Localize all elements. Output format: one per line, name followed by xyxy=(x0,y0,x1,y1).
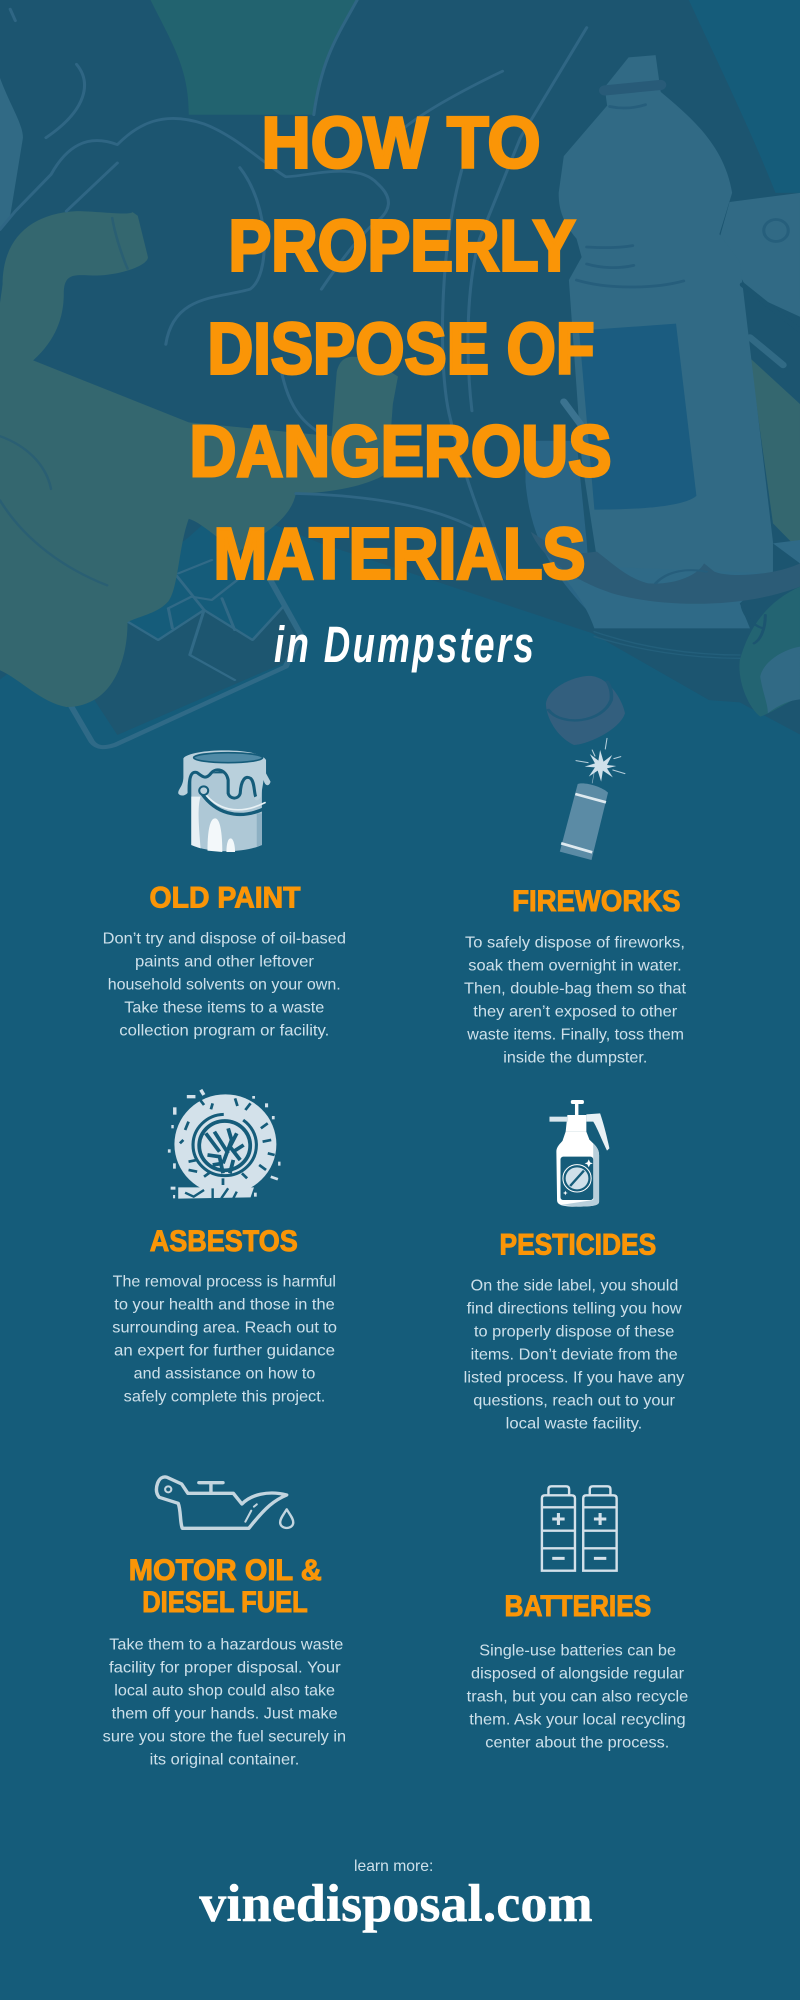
text: old paint: Don’t try and dispose of oil-based xyxy=(103,930,346,947)
website address: vinedisposal.com xyxy=(199,1875,593,1933)
text: pesticides: questions, reach out to your xyxy=(473,1392,676,1409)
text: pesticides: listed process. If you have any xyxy=(464,1369,684,1386)
text: fireworks: waste items. Finally, toss them xyxy=(466,1026,684,1043)
text: asbestos: to your health and those in the xyxy=(114,1296,335,1313)
panel: motor oil and diesel fuel xyxy=(103,1477,346,1768)
heading: old paint: OLD PAINT xyxy=(150,882,300,914)
title xyxy=(190,102,612,594)
heading: fireworks: FIREWORKS xyxy=(512,885,680,918)
title: DISPOSE OF xyxy=(208,308,594,390)
icon: two batteries xyxy=(542,1486,617,1571)
text: batteries: Single-use batteries can be xyxy=(479,1642,676,1659)
text: asbestos: and assistance on how to xyxy=(134,1365,315,1382)
heading: asbestos: ASBESTOS xyxy=(150,1225,298,1258)
text: pesticides: items. Don’t deviate from the xyxy=(471,1346,678,1363)
icon: paint can xyxy=(178,750,271,852)
text: fireworks xyxy=(464,934,687,1066)
text: old paint: household solvents on your own. xyxy=(108,976,341,993)
icon: oil can xyxy=(156,1477,293,1528)
text: motor oil and diesel fuel: local auto shop could also take xyxy=(114,1682,335,1699)
text: batteries: trash, but you can also recycle xyxy=(467,1688,688,1705)
title: HOW TO xyxy=(262,102,540,184)
text: fireworks: Then, double-bag them so that xyxy=(464,980,687,997)
footer xyxy=(199,1858,593,1933)
text: pesticides: find directions telling you how xyxy=(467,1300,682,1317)
learn more label: learn more: xyxy=(354,1858,433,1875)
heading: motor oil and diesel fuel: DIESEL FUEL xyxy=(142,1586,308,1619)
panel: asbestos xyxy=(112,1089,337,1405)
text: old paint: Take these items to a waste xyxy=(124,999,324,1016)
text: batteries xyxy=(467,1642,688,1751)
heading: batteries: BATTERIES xyxy=(504,1590,651,1623)
text: pesticides: On the side label, you should xyxy=(471,1277,678,1294)
text: pesticides xyxy=(464,1277,684,1432)
text: motor oil and diesel fuel: its original container. xyxy=(150,1751,299,1768)
title: DANGEROUS xyxy=(190,411,612,492)
text: pesticides: local waste facility. xyxy=(506,1415,642,1432)
icon: firecracker xyxy=(560,738,625,860)
text: batteries: them. Ask your local recycling xyxy=(469,1711,686,1728)
text: fireworks: soak them overnight in water. xyxy=(468,957,682,974)
panel: old paint xyxy=(103,750,346,1039)
heading: pesticides: PESTICIDES xyxy=(500,1228,656,1262)
text: fireworks: they aren’t exposed to other xyxy=(473,1003,678,1020)
panel: batteries xyxy=(467,1486,688,1751)
title: MATERIALS xyxy=(214,514,586,594)
text: motor oil and diesel fuel: them off your hands. Just make xyxy=(112,1705,338,1722)
text: pesticides: to properly dispose of these xyxy=(474,1323,674,1340)
text: fireworks: To safely dispose of fireworks, xyxy=(465,934,685,951)
text: motor oil and diesel fuel: sure you store the fuel securely in xyxy=(103,1728,346,1745)
bottle cap illustration xyxy=(546,676,625,745)
background illustration: waste items xyxy=(0,0,800,747)
text: batteries: disposed of alongside regular xyxy=(471,1665,685,1682)
heading: motor oil and diesel fuel: MOTOR OIL & xyxy=(129,1554,322,1587)
text: old paint: collection program or facility. xyxy=(119,1022,329,1039)
heading: motor oil and diesel fuel xyxy=(129,1554,322,1619)
text: old paint: paints and other leftover xyxy=(135,953,315,970)
text: asbestos: safely complete this project. xyxy=(124,1388,325,1405)
panel: fireworks xyxy=(464,738,687,1066)
text: batteries: center about the process. xyxy=(485,1734,669,1751)
icon: cracked asbestos tile xyxy=(168,1089,281,1199)
text: fireworks: inside the dumpster. xyxy=(503,1049,647,1066)
text: asbestos: an expert for further guidance xyxy=(114,1342,335,1359)
text: asbestos: surrounding area. Reach out to xyxy=(112,1319,337,1336)
subtitle: in Dumpsters xyxy=(274,617,534,673)
text: motor oil and diesel fuel: Take them to a hazardous waste xyxy=(109,1636,343,1653)
icon: pesticide sprayer xyxy=(549,1100,609,1207)
text: motor oil and diesel fuel xyxy=(103,1636,346,1768)
text: asbestos: The removal process is harmful xyxy=(113,1273,336,1290)
text: asbestos xyxy=(112,1273,337,1405)
text: motor oil and diesel fuel: facility for proper disposal. Your xyxy=(109,1659,341,1676)
title: PROPERLY xyxy=(228,206,576,286)
text: old paint xyxy=(103,930,346,1039)
panel: pesticides xyxy=(464,1100,684,1432)
